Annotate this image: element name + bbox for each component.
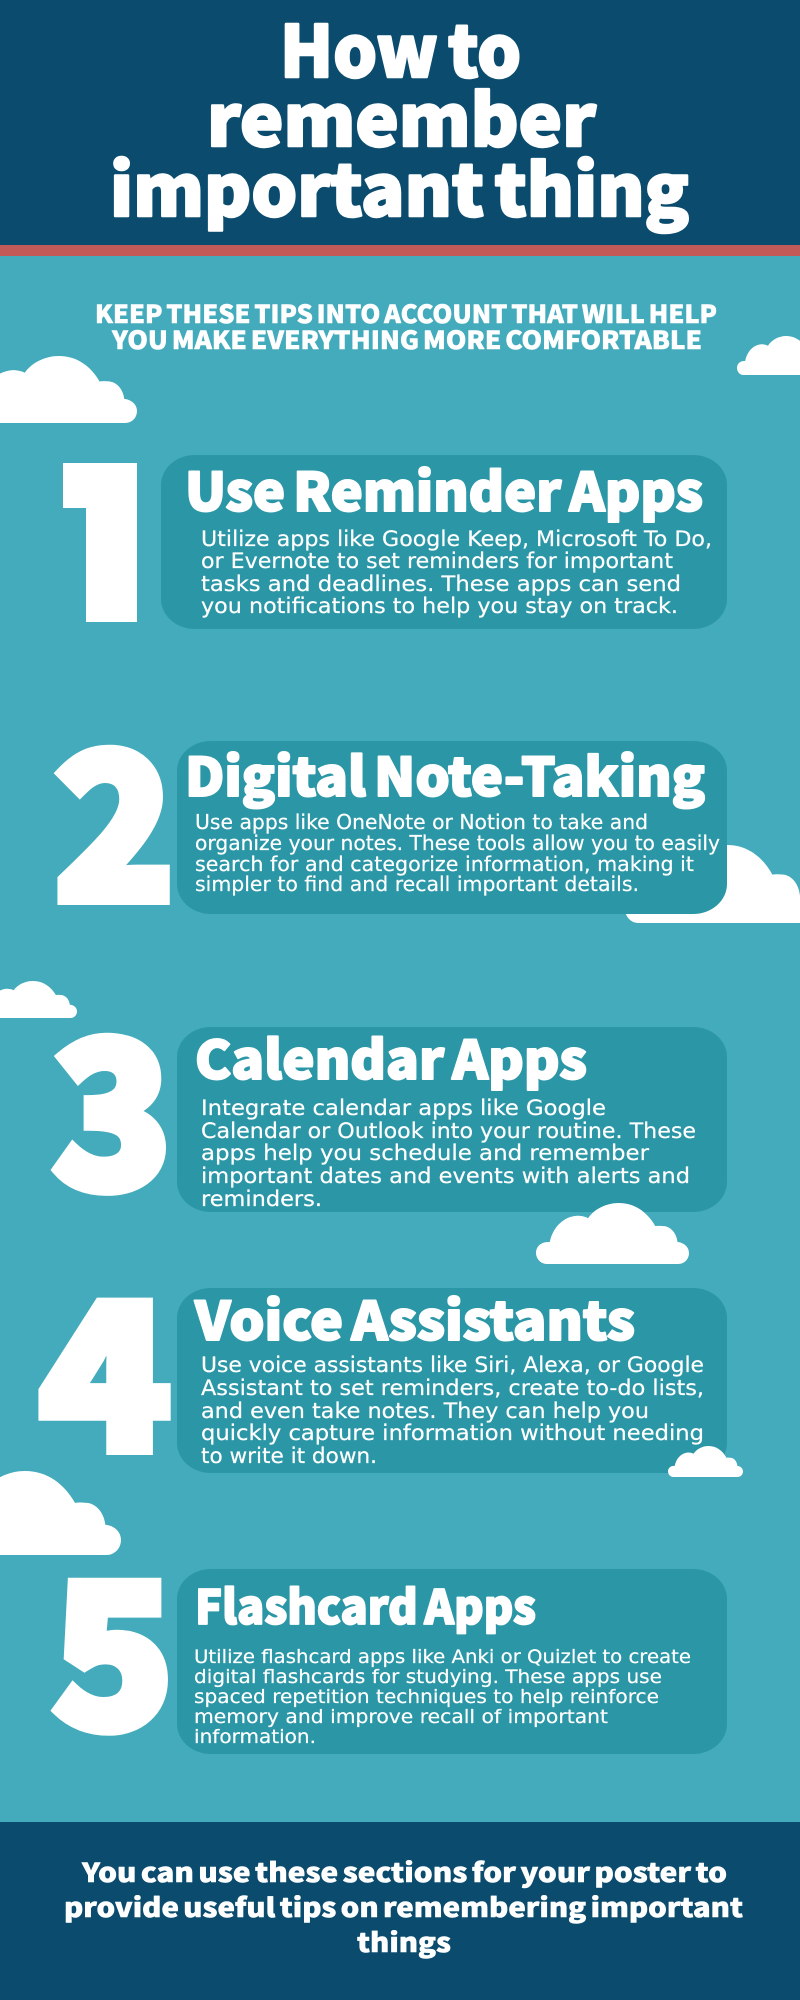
card 5 background bbox=[177, 1569, 727, 1754]
footer text: things bbox=[357, 1923, 451, 1960]
card 2 text: organize your notes. These tools allow you to easily bbox=[195, 831, 720, 855]
card 1 text: you notifications to help you stay on track. bbox=[201, 594, 678, 619]
cloud: lower left bbox=[0, 1471, 121, 1555]
tip 2 bbox=[54, 666, 727, 959]
footer band bbox=[0, 1822, 800, 2000]
cloud: left of card 3 bbox=[0, 981, 77, 1018]
card 5 text: information. bbox=[194, 1726, 316, 1748]
subtitle: YOU MAKE EVERYTHING MORE COMFORTABLE bbox=[111, 321, 702, 357]
footer text bbox=[64, 1853, 743, 1960]
card 4 text: quickly capture information without needing bbox=[201, 1421, 704, 1445]
card 4 text: Assistant to set reminders, create to-do lists, bbox=[201, 1376, 704, 1400]
card 1 heading: Use Reminder Apps bbox=[185, 451, 703, 527]
card 4 text: to write it down. bbox=[201, 1444, 377, 1468]
header band bbox=[0, 0, 800, 256]
card 5 text: Utilize flashcard apps like Anki or Quizlet to create bbox=[194, 1646, 691, 1668]
card 5 text: digital flashcards for studying. These apps use bbox=[194, 1666, 662, 1688]
card 2 background bbox=[177, 741, 727, 914]
card 1 text: Utilize apps like Google Keep, Microsoft To Do, bbox=[201, 527, 712, 552]
card 1 text: tasks and deadlines. These apps can send bbox=[201, 572, 681, 597]
card 3 text bbox=[201, 1096, 696, 1211]
card 2 text: search for and categorize information, making it bbox=[195, 852, 694, 876]
card 3 text: reminders. bbox=[201, 1187, 322, 1211]
footer text: You can use these sections for your poster to bbox=[81, 1853, 727, 1890]
card 3 text: apps help you schedule and remember bbox=[201, 1141, 649, 1165]
cloud: top right bbox=[737, 336, 800, 375]
title bbox=[110, 0, 689, 237]
card 2 heading: Digital Note-Taking bbox=[185, 736, 705, 812]
card 1 text: or Evernote to set reminders for important bbox=[201, 549, 673, 574]
card 4 text: Use voice assistants like Siri, Alexa, or Google bbox=[201, 1353, 704, 1377]
number 3: 3 bbox=[52, 954, 172, 1247]
card 1 text bbox=[201, 527, 712, 619]
card 5 text bbox=[194, 1646, 691, 1748]
number 1: 1 bbox=[50, 416, 170, 668]
cloud: below card 3 bbox=[536, 1203, 689, 1264]
card 2 text: simpler to find and recall important details. bbox=[195, 872, 639, 896]
footer text: provide useful tips on remembering important bbox=[64, 1888, 743, 1925]
cloud: behind card 2 bbox=[625, 845, 800, 923]
card 5 text: spaced repetition techniques to help reinforce bbox=[194, 1686, 659, 1708]
card 4 text bbox=[201, 1353, 704, 1468]
number 5: 5 bbox=[52, 1496, 174, 1786]
card 3 text: Calendar or Outlook into your routine. These bbox=[201, 1119, 696, 1143]
card 1 background bbox=[161, 455, 727, 629]
card 3 text: important dates and events with alerts and bbox=[201, 1164, 690, 1188]
card 3 heading: Calendar Apps bbox=[195, 1019, 587, 1095]
number 4: 4 bbox=[39, 1216, 171, 1509]
tip 1 bbox=[63, 455, 727, 629]
card 4 heading: Voice Assistants bbox=[194, 1280, 635, 1356]
cloud: corner of card 4 bbox=[668, 1446, 743, 1477]
title: remember bbox=[207, 65, 596, 167]
tip 4 bbox=[39, 1216, 727, 1509]
title: important thing bbox=[110, 135, 689, 237]
card 4 text: and even take notes. They can help you bbox=[201, 1399, 649, 1423]
card 2 text: Use apps like OneNote or Notion to take and bbox=[195, 810, 648, 834]
number 2: 2 bbox=[54, 666, 175, 959]
card 5 text: memory and improve recall of important bbox=[194, 1706, 608, 1728]
cloud: top left bbox=[0, 356, 137, 423]
tip 3 bbox=[52, 954, 727, 1247]
card 2 text bbox=[195, 810, 720, 896]
subtitle bbox=[95, 295, 717, 357]
card 3 background bbox=[177, 1027, 727, 1212]
tip 5 bbox=[52, 1496, 727, 1786]
card 5 heading: Flashcard Apps bbox=[195, 1569, 536, 1638]
card 3 text: Integrate calendar apps like Google bbox=[201, 1096, 606, 1120]
card 4 background bbox=[177, 1288, 727, 1473]
subtitle: KEEP THESE TIPS INTO ACCOUNT THAT WILL HELP bbox=[95, 295, 717, 331]
